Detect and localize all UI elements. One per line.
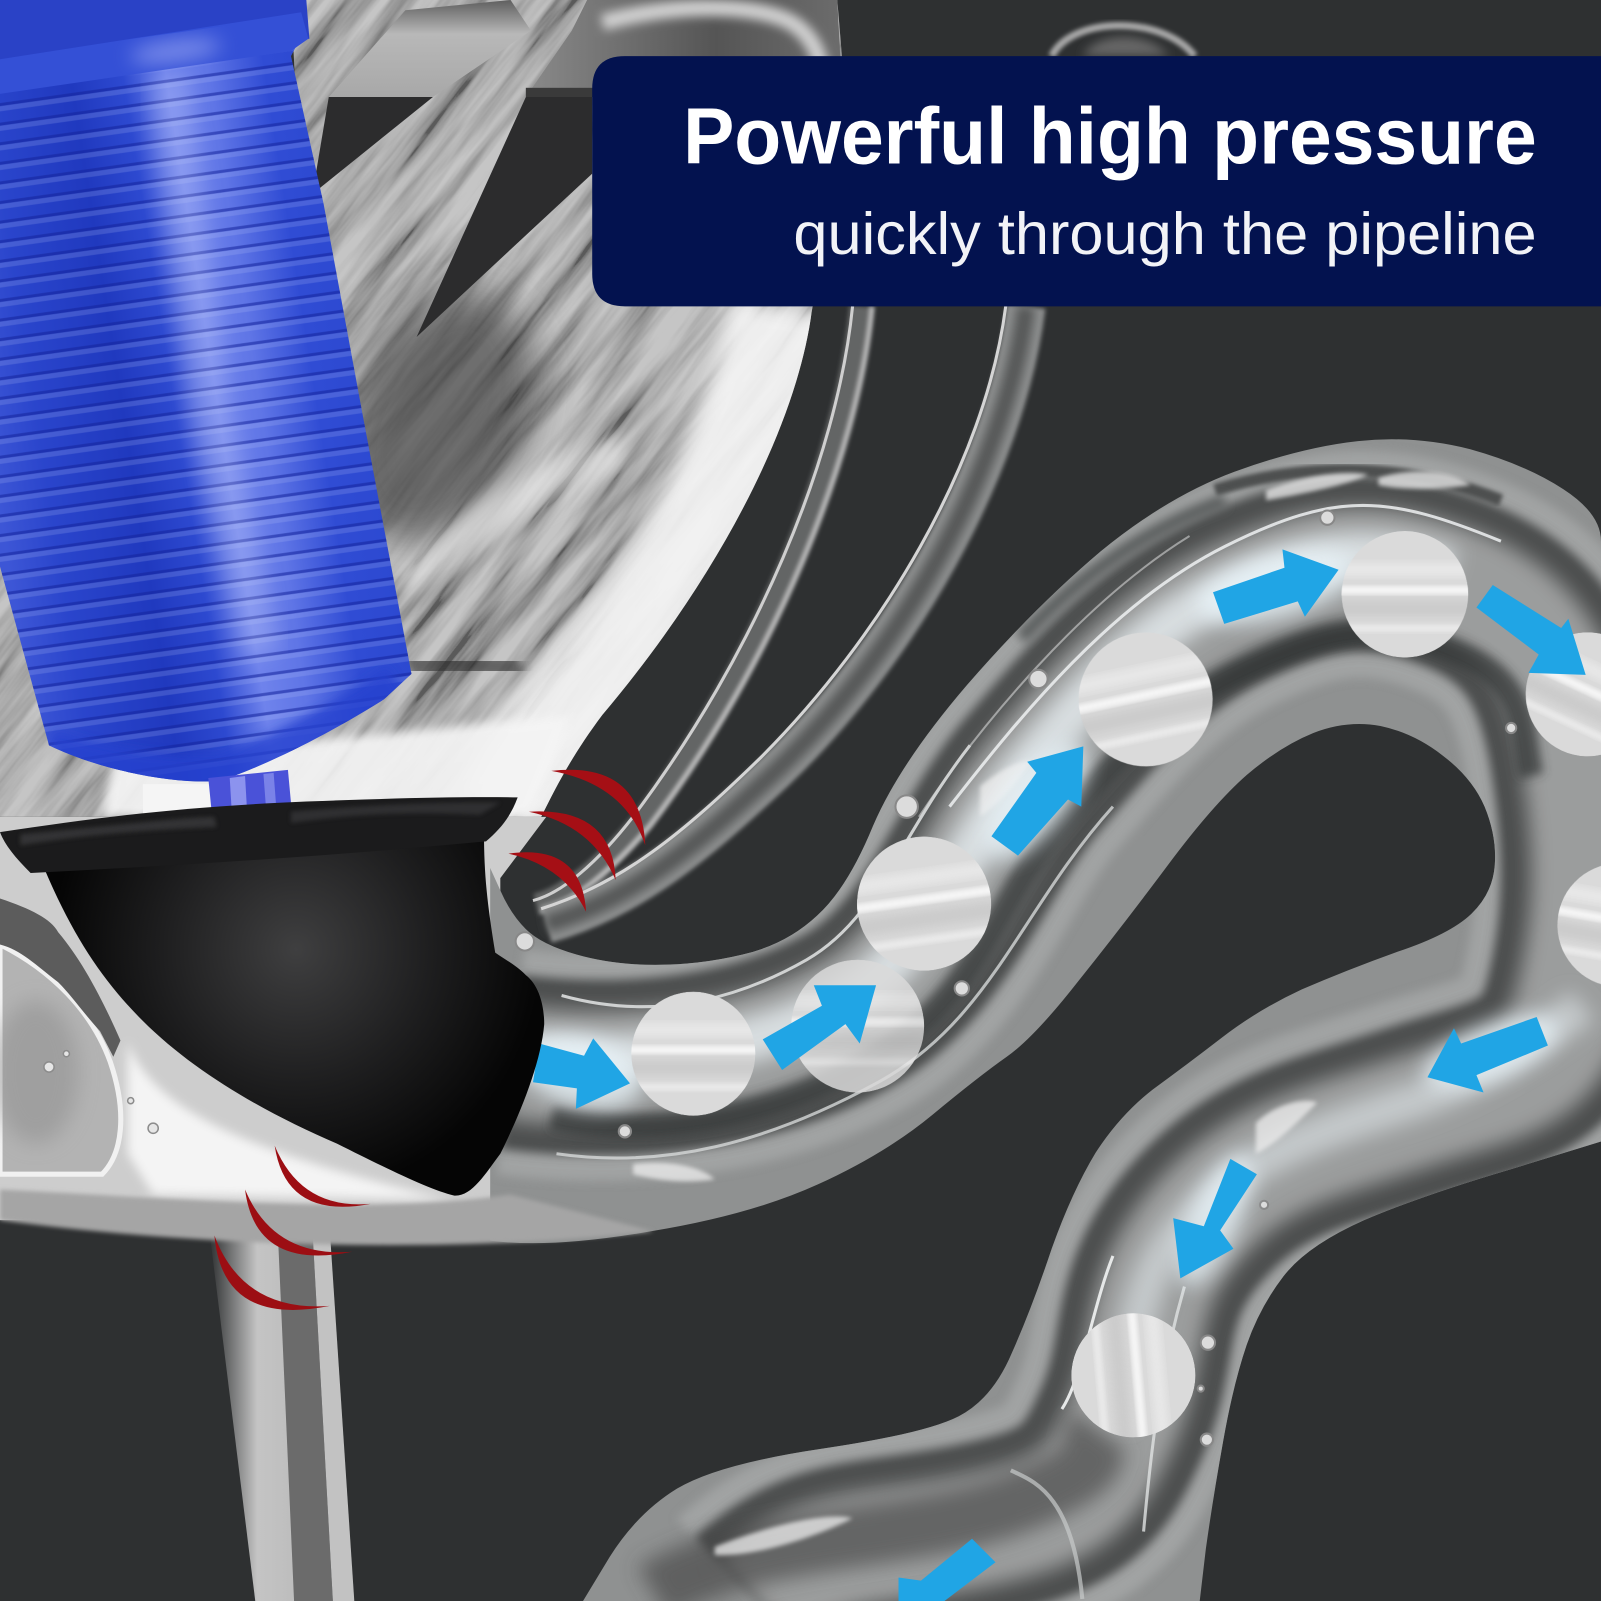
headline panel (592, 56, 1601, 306)
blue flow arrows (533, 549, 1586, 1601)
arrow 6 (1427, 1017, 1548, 1093)
black suction cup (0, 797, 544, 1196)
arrow 1 (533, 1038, 630, 1109)
bubbles (516, 511, 1516, 1446)
arrow 4 (1213, 549, 1339, 624)
ball 8 (1065, 1300, 1201, 1451)
arrow 2 (763, 985, 876, 1070)
ball 4 (1058, 618, 1234, 781)
arrow 5 (1476, 585, 1586, 675)
red vibration arcs upper (508, 770, 645, 912)
red vibration arcs lower (214, 1146, 371, 1310)
subheading: quickly through the pipeline (793, 200, 1537, 267)
toilet bowl top rim (329, 0, 1195, 97)
ball 1 (783, 960, 933, 1093)
plunger blue cylinder (0, 0, 429, 796)
arrow 8 (899, 1539, 996, 1601)
ball 5 (1333, 531, 1476, 658)
ball 7 (1540, 852, 1601, 998)
plunger collar (0, 12, 308, 94)
ball 3 (840, 827, 1008, 981)
bowl base and left lobes (0, 817, 546, 1220)
silver base band (0, 1190, 653, 1245)
main S-shaped pipe (490, 439, 1601, 1601)
dark gaps in bowl (312, 97, 592, 337)
drain pipe below bowl (209, 1230, 354, 1601)
heading: Powerful high pressure (683, 91, 1537, 180)
pipe inner channel shading (511, 470, 1588, 1601)
plunger rod (143, 770, 293, 829)
arrow 3 (991, 746, 1083, 856)
balls travelling through pipe (623, 531, 1601, 1451)
curved pipe rings behind bowl (533, 306, 1026, 924)
water glow behind arrows (514, 536, 1567, 1295)
ball 6 (1498, 608, 1601, 780)
arrow 7 (1173, 1159, 1257, 1278)
water foam streaks (633, 472, 1470, 1555)
toilet bowl swirling water (0, 0, 842, 817)
ball 2 (623, 992, 763, 1116)
